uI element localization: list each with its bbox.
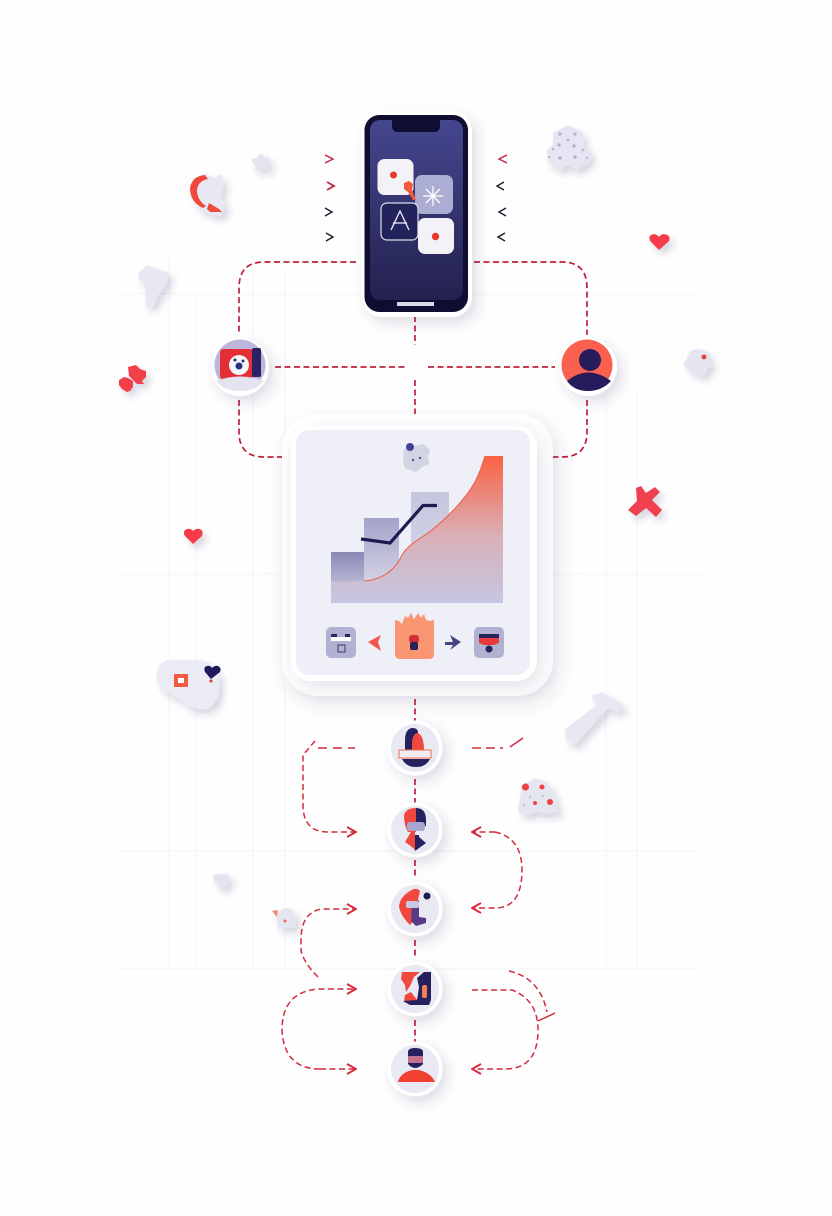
small orange square — [174, 674, 188, 687]
navy heart — [204, 666, 221, 679]
decoration: star right — [683, 349, 713, 376]
trend line — [361, 506, 437, 543]
person node 3 — [388, 882, 442, 936]
decoration: small dotted blob — [272, 908, 296, 928]
decoration: red clover — [119, 365, 146, 392]
app tile: white with red dot lower — [418, 218, 454, 254]
flow arrows: dashed loops between people — [282, 738, 555, 1069]
phone notch — [392, 119, 440, 132]
arrow: red left — [368, 635, 381, 651]
decoration: red cross — [628, 486, 662, 517]
icon tile: centre orange — [395, 613, 434, 659]
decoration: small pale heart — [213, 874, 230, 889]
icon tile: right — [474, 627, 504, 658]
decoration: red and lilac curl — [190, 174, 226, 216]
app tile: periwinkle with asterisk — [415, 175, 453, 214]
node: right avatar — [559, 338, 617, 396]
person node 4 — [388, 962, 442, 1016]
decoration: foot shape — [138, 265, 170, 307]
decoration: heart top right — [649, 234, 670, 250]
chevrons right of phone — [497, 155, 507, 241]
phone home indicator — [397, 302, 434, 306]
connector lines: dashed network around phone and chart — [239, 262, 587, 1042]
phone — [362, 111, 472, 317]
person node 2 — [388, 802, 442, 858]
decoration: T shape — [565, 692, 624, 745]
decorative blob with blue dot — [403, 443, 430, 472]
person node 1 — [388, 720, 442, 776]
arrow: indigo right — [445, 635, 461, 650]
panel: chart card — [282, 414, 553, 696]
app tile: outlined letter A — [381, 203, 418, 240]
bar chart — [331, 492, 449, 603]
icon tile: left — [326, 627, 356, 658]
decoration: lilac cluster — [547, 125, 592, 170]
decoration: heart left — [184, 529, 203, 544]
person node 5 — [388, 1042, 442, 1096]
decoration: dotted blob with red dots — [518, 778, 559, 815]
app tile: white with red dot — [378, 159, 414, 195]
red spark between tiles — [404, 181, 416, 200]
node: left badge — [211, 338, 269, 396]
chevrons left of phone — [325, 155, 334, 241]
area curve — [331, 456, 503, 603]
decoration: small star — [251, 153, 270, 172]
decoration: blob with heart — [157, 660, 221, 710]
